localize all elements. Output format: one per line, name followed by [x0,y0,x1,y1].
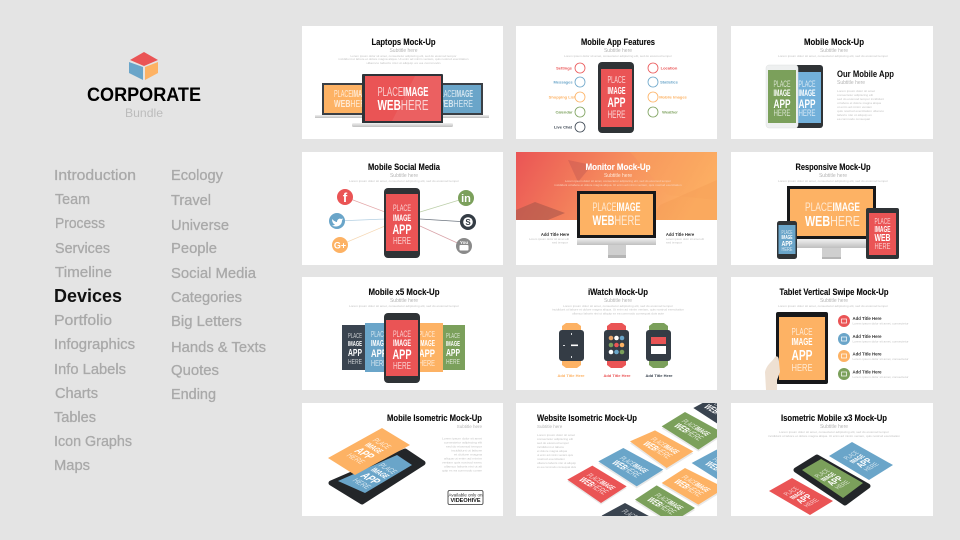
monitor: WEBHERE [805,213,860,230]
navigation menu: column 1: Infographics [54,336,135,353]
navigation menu: column 1: Tables [54,409,96,426]
white phone [766,65,798,128]
phone: IMAGE [393,213,411,224]
list item: orange: Lorem ipsum dolor sit amet, consectetur [852,357,908,361]
body text [442,436,483,472]
left feature list: Live Chat [554,124,573,130]
list item: green: Add Title Here [852,370,882,374]
list item: red: Add Title Here [852,316,882,321]
blue screen: HERE [371,359,387,368]
subtitle and body text: ullamco laboris nisi ut aliquip ex ea commodo consequat duis aute [572,312,664,316]
icon: twitter [329,213,345,229]
side text: our mobile app: Our Mobile App [837,69,894,80]
body text: nostrud exercitation [537,457,565,461]
left feature list [549,63,585,132]
body text: sed do eiusmod tempor [446,444,482,448]
isometric red screen [769,478,833,515]
subtitle and body text: Subtitle here [604,48,632,54]
right caption: Lorem ipsum dolor sit amet elit [666,237,704,241]
subtitle and body text: Lorem ipsum dolor sit amet, consectetur adipiscing elit, sed do eiusmod tempor [349,179,459,183]
subtitle and body text: Subtitle here [820,48,848,54]
left laptop: PLACEIMAGE [334,89,370,100]
isometric screens: WEBHERE [609,459,644,479]
isometric blue screen: HERE [863,462,881,472]
center phone: PLACE [393,329,411,340]
panel: responsive mock-up [731,152,933,265]
isometric screens [567,403,717,516]
tablet: HERE [874,242,890,251]
side text: our mobile app [837,69,894,121]
isometric blue screen: IMAGE [849,454,867,464]
subtitle and body text: Lorem ipsum dolor sit amet, consectetur adipiscing elit, sed do eiusmod tempor [778,179,888,183]
isometric screens: WEBHERE [701,403,736,423]
videohive badge [448,490,483,504]
body text: ex ea commodo consequat duis [537,465,576,469]
floating orange screen: APP [351,446,378,461]
green screen: PLACE [446,333,460,340]
isometric screens: WEBHERE [702,460,737,480]
navigation menu: column 2 [171,167,266,403]
isometric screens: WEBHERE [644,496,679,516]
navigation menu: column 2: Ecology [171,167,223,184]
subtitle and body text: Subtitle here [820,298,848,304]
phone: HERE [393,236,411,247]
side text: our mobile app: quis nostrud exercitation ullamco [837,109,884,113]
red watch [604,323,629,368]
isometric phone: HERE [834,480,852,490]
left caption: Lorem ipsum dolor sit amet elit [529,237,569,241]
phone: APP [782,241,793,248]
body text: et dolore magna aliqua [537,449,567,453]
isometric screens: PLACEIMAGE [679,418,713,437]
isometric red screen: HERE [803,498,821,508]
isometric screens: WEBHERE [671,422,706,442]
heading: Mobile x5 Mock-Up [368,287,440,298]
watch captions: Add Title Here [645,373,673,378]
black phone: PLACE [798,79,816,89]
black phone [795,65,823,128]
orange watch [559,323,584,368]
subtitle and body text: Subtitle here [604,298,632,304]
isometric phone [796,457,868,503]
navigation menu: column 2: People [171,240,217,257]
center phone [384,313,420,383]
heading: Isometric Mobile x3 Mock-Up [781,413,887,424]
tablet [776,312,828,384]
list item: red: Lorem ipsum dolor sit amet, consectetur [852,322,908,326]
list item: green [838,368,908,380]
list item: blue [838,333,908,345]
body text: aliqua ut enim ad minim [444,456,483,460]
tablet: HERE [792,362,812,374]
panel: mobile mock-up [731,26,933,139]
isometric screens: PLACEIMAGE [619,508,653,527]
tablet: PLACE [874,217,890,226]
center phone: IMAGE [393,338,411,349]
subtitle and body text [778,298,888,308]
right feature list: Statistics [660,80,679,84]
subtitle and body text: Lorem ipsum dolor sit amet, consectetur adipiscing elit, sed do eiusmod tempor [779,430,889,434]
green screen: IMAGE [446,341,460,348]
list item: green: Lorem ipsum dolor sit amet, consectetur [852,375,908,379]
right laptop: PLACEIMAGE [437,89,473,100]
left laptop: WEBHERE [334,98,370,110]
center laptop: PLACEIMAGE [378,84,429,99]
subtitle and body text [338,48,469,65]
subtitle and body text: incididunt ut labore et dolore magna aliqua. Ut enim ad minim veniam, quis nostrud exercitation [768,434,900,438]
orange screen: PLACE [419,330,435,339]
panel: mobile x5 mock-up [302,277,503,390]
body text: et dolore magna [454,452,482,456]
floating orange screen: PLACE [370,437,394,450]
isometric phone: PLACE [814,468,832,479]
tablet: APP [792,347,812,364]
left feature list: Messages [553,80,573,84]
isometric screens: PLACEIMAGE [584,472,618,491]
navigation menu: column 1: Introduction [54,167,136,184]
isometric red screen: APP [794,493,816,505]
body text: consectetur adipiscing elit [537,437,573,441]
green screen: APP [446,348,460,359]
videohive badge: VIDEOHIVE [450,498,481,504]
center phone: APP [392,346,412,362]
logo: corporate bundle [87,52,201,120]
navigation menu: column 2: Travel [171,192,211,209]
hand [765,356,780,390]
body text: ullamco laboris nisi ut aliquip [537,461,576,465]
panel: website isometric mock-up [516,403,717,516]
blue screen [365,323,387,372]
icon: cube [129,52,158,80]
green watch [646,323,671,368]
blue screen: APP [371,348,387,360]
subtitle and body text: Lorem ipsum dolor sit amet, consectetur adipiscing elit, sed do eiusmod tempor [778,54,888,58]
isometric screens: PLACEIMAGE [710,456,744,475]
navigation menu: column 2: Universe [171,217,229,234]
monitor [577,191,656,258]
monitor [787,186,876,259]
subtitle and body text [564,48,672,58]
gradient header with facets [516,152,717,220]
videohive badge: Available only on [449,492,483,498]
panel: mobile isometric mock-up [302,403,503,516]
list item: orange [838,350,908,362]
black phone: HERE [798,108,816,118]
navigation menu: column 2: Quotes [171,362,219,379]
floating orange screen [328,428,410,475]
dark screen: PLACE [348,333,362,340]
logo wordmark: CORPORATE [87,84,201,106]
navigation menu: column 1: Info Labels [54,361,126,378]
phone: PLACE [393,203,411,214]
navigation menu: column 1: Timeline [55,264,112,281]
dark screen [342,325,367,370]
panel: laptops mock-up [302,26,503,139]
body text [537,433,576,469]
watch captions: Add Title Here [557,373,585,378]
heading: Monitor Mock-Up [586,162,651,173]
list item: orange: Add Title Here [852,352,882,356]
navigation menu: column 1: Portfolio [54,312,112,329]
phone: PLACE [608,75,626,86]
body text: ullamco laboris nisi ut ali [444,464,482,468]
orange screen: APP [419,348,435,360]
subtitle and body text [349,173,459,183]
white phone: HERE [774,108,790,118]
phone: HERE [782,247,793,253]
panel: isometric mobile x3 mock-up [731,403,933,516]
phone: HERE [608,109,626,121]
panel: mobile app features [516,26,717,139]
subtitle and body text: Lorem ipsum dolor sit amet, consectetur adipiscing elit, sed do eiusmod tempor [350,54,456,58]
subtitle and body text: Lorem ipsum dolor sit amet, consectetur adipiscing elit, sed do eiusmod tempor [563,304,673,308]
navigation menu: column 1: Services [55,240,110,257]
phone [777,221,797,259]
watch captions [557,373,673,378]
subtitle and body text: incididunt ut labore et dolore magna aliqua. Ut enim ad minim veniam, quis nostrud exercitation [554,183,682,187]
right feature list: Mobile Images [659,94,688,100]
subtitle and body text: Subtitle here [820,424,848,430]
subtitle and body text: ullamco laboris nisi ut aliquip ex ea commodo [366,61,441,65]
subtitle and body text: incididunt ut labore et dolore magna aliqua. Ut enim ad minim veniam, quis nostrud exercitation [338,57,469,61]
left laptop [315,83,370,118]
tablet: IMAGE [792,337,813,348]
icon: google plus [332,237,348,253]
subtitle and body text: Subtitle here [604,173,632,179]
navigation menu: column 2: Big Letters [171,313,242,330]
isometric screens: WEBHERE [640,440,675,460]
heading: Mobile Social Media [368,162,441,173]
right feature list: Location [661,66,678,70]
icon: linkedin: in [461,193,471,205]
panel: iwatch mock-up [516,277,717,390]
dark screen: IMAGE [348,341,362,348]
subtitle and body text: Lorem ipsum dolor sit amet, consectetur adipiscing elit, sed do eiusmod tempor [565,179,671,183]
icon: youtube [456,238,472,254]
left caption: sed tempor [552,240,568,244]
center laptop [352,74,453,127]
monitor: PLACEIMAGE [805,200,860,214]
right caption: sed tempor [666,240,682,244]
subtitle and body text: Subtitle here [819,173,847,179]
icon: linkedin [458,190,474,206]
navigation menu: column 1: Icon Graphs [54,433,132,450]
phone [384,188,420,258]
body text: quip ex ea commodo conse [442,468,482,472]
list item: red [838,315,908,327]
subtitle: Subtitle here [537,424,563,429]
navigation menu: column 1: Process [55,215,105,232]
body text: ut enim ad minim veniam quis [537,453,573,457]
body text: veniam quis nostrud exerc [442,460,483,464]
icon: skype [460,214,476,230]
subtitle and body text: Lorem ipsum dolor sit amet, consectetur adipiscing elit, sed do eiusmod tempor [778,304,888,308]
body text: consectetur adipiscing elit [444,440,482,444]
phone: PLACE [782,230,793,236]
subtitle and body text: Lorem ipsum dolor sit amet, consectetur adipiscing elit, sed do eiusmod tempor [564,54,672,58]
list item: blue: Add Title Here [852,334,882,339]
isometric red screen: IMAGE [789,490,807,500]
tablet [866,208,899,259]
blue screen: PLACE [371,330,387,339]
side text: our mobile app: sed do eiusmod tempor incididunt [837,97,884,101]
navigation menu: column 1 [54,167,136,474]
black phone: IMAGE [798,88,816,98]
subtitle and body text: Subtitle here [389,48,418,54]
isometric phone: HERE [350,477,374,490]
subtitle and body text: Subtitle here [390,298,418,304]
left feature list: Settings [556,66,573,70]
heading: Mobile App Features [581,37,655,48]
orange screen [418,323,443,372]
right caption: Add Title Here [666,232,695,237]
left feature list: Calendar [555,110,573,114]
isometric screens: WEBHERE [671,478,706,498]
green screen: HERE [446,359,460,366]
body text: incididunt ut labore [537,445,564,449]
monitor: WEBHERE [592,212,640,228]
navigation menu: column 2: Categories [171,289,242,306]
side text: our mobile app: ut enim ad minim veniam [837,105,873,109]
subtitle and body text [554,173,682,187]
isometric blue screen: PLACE [843,450,861,461]
connector lines [337,197,468,246]
icon: youtube: You [460,240,468,245]
white phone: IMAGE [774,88,790,98]
isometric screens: PLACEIMAGE [652,492,686,511]
body text: Lorem ipsum dolor sit amet [442,436,482,440]
floating orange screen: IMAGE [362,441,386,455]
list item: blue: Lorem ipsum dolor sit amet, consectetur [852,340,908,344]
body text: incididunt ut labore [451,448,482,452]
icon: google plus: G+ [334,240,346,250]
center laptop: WEBHERE [378,98,429,114]
isometric blue screen: APP [854,457,876,469]
dark screen: HERE [348,359,362,366]
subtitle and body text [778,48,888,58]
panel: tablet vertical swipe mock-up [731,277,933,390]
phone: APP [392,221,412,237]
navigation menu: column 1: Devices [54,286,122,306]
isometric phone: PLACE [376,462,400,475]
isometric phone: APP [825,475,847,487]
left caption [529,232,570,244]
navigation menu: column 2: Social Media [171,265,257,282]
body text: sed do eiusmod tempor [537,441,569,445]
side text: our mobile app: laboris nisi ut aliquip ex [837,113,873,117]
subtitle and body text [778,173,888,183]
monitor: PLACEIMAGE [592,200,640,214]
heading: Mobile Mock-Up [804,37,864,48]
green screen [441,325,465,370]
phone [598,62,634,133]
heading: Responsive Mock-Up [796,162,871,173]
heading: Website Isometric Mock-Up [537,413,637,424]
isometric phone: APP [357,471,384,486]
center phone: HERE [393,361,411,372]
right laptop: WEBHERE [437,98,473,110]
heading: Laptops Mock-Up [372,37,436,48]
logo subtitle: Bundle [125,106,163,120]
icon: facebook: f [343,190,348,205]
icon: skype: S [465,218,471,227]
panel: mobile social media [302,152,503,265]
isometric screens: PLACEIMAGE [709,399,743,418]
left feature list: Shopping List [549,94,576,100]
right caption [666,232,704,244]
isometric phone [331,451,423,502]
subtitle and body text: Subtitle here [390,173,418,179]
side text: our mobile app: Subtitle here [837,80,865,86]
tablet: WEB [874,233,890,244]
tablet: IMAGE [874,225,891,234]
isometric blue screen [829,442,893,480]
side text: our mobile app: ut labore et dolore magna aliqua [837,101,881,105]
side text: our mobile app: consectetur adipiscing elit [837,93,873,97]
subtitle and body text: Lorem ipsum dolor sit amet, consectetur adipiscing elit, sed do eiusmod tempor [349,304,459,308]
subtitle and body text: incididunt ut labore et dolore magna aliqua. Ut enim ad minim veniam, quis nostrud exercitation [552,308,684,312]
heading: iWatch Mock-Up [588,287,648,298]
phone: IMAGE [782,235,793,241]
navigation menu: column 2: Hands & Texts [171,339,266,356]
left caption: Add Title Here [541,232,570,237]
isometric red screen: PLACE [783,486,801,497]
isometric screens: PLACEIMAGE [648,436,682,455]
floating orange screen: HERE [344,452,368,465]
phone: IMAGE [608,85,626,97]
heading: Tablet Vertical Swipe Mock-Up [780,287,889,298]
subtitle and body text [552,298,684,316]
side text: our mobile app: Lorem ipsum dolor sit amet [837,89,875,93]
blue screen: IMAGE [371,339,387,348]
white phone: APP [774,97,790,111]
navigation menu: column 1: Maps [54,457,90,474]
isometric screens: PLACEIMAGE [679,474,713,493]
right feature list [648,63,688,117]
phone: APP [608,94,626,110]
icon: facebook [337,189,353,205]
subtitle: Subtitle here [457,424,482,429]
navigation menu: column 1: Team [55,191,90,208]
right feature list: Weather [662,110,678,114]
isometric screens: PLACEIMAGE [617,455,651,474]
black phone: APP [798,97,816,111]
side text: our mobile app: ea commodo consequat [837,117,870,121]
navigation menu: column 1: Charts [55,385,98,402]
watch captions: Add Title Here [603,373,631,378]
subtitle and body text [768,424,900,438]
isometric screens: WEBHERE [576,476,611,496]
right laptop [437,83,489,118]
white phone: PLACE [774,79,790,89]
panel: monitor mock-up [516,152,717,265]
navigation menu: column 2: Ending [171,386,216,403]
body text: Lorem ipsum dolor sit amet [537,433,575,437]
heading: Mobile Isometric Mock-Up [387,413,482,424]
dark screen: APP [348,348,362,359]
isometric phone: IMAGE [368,466,392,480]
orange screen: IMAGE [419,339,435,348]
subtitle and body text [349,298,459,308]
orange screen: HERE [419,359,435,368]
isometric phone: IMAGE [820,472,838,482]
tablet: PLACE [792,327,813,338]
